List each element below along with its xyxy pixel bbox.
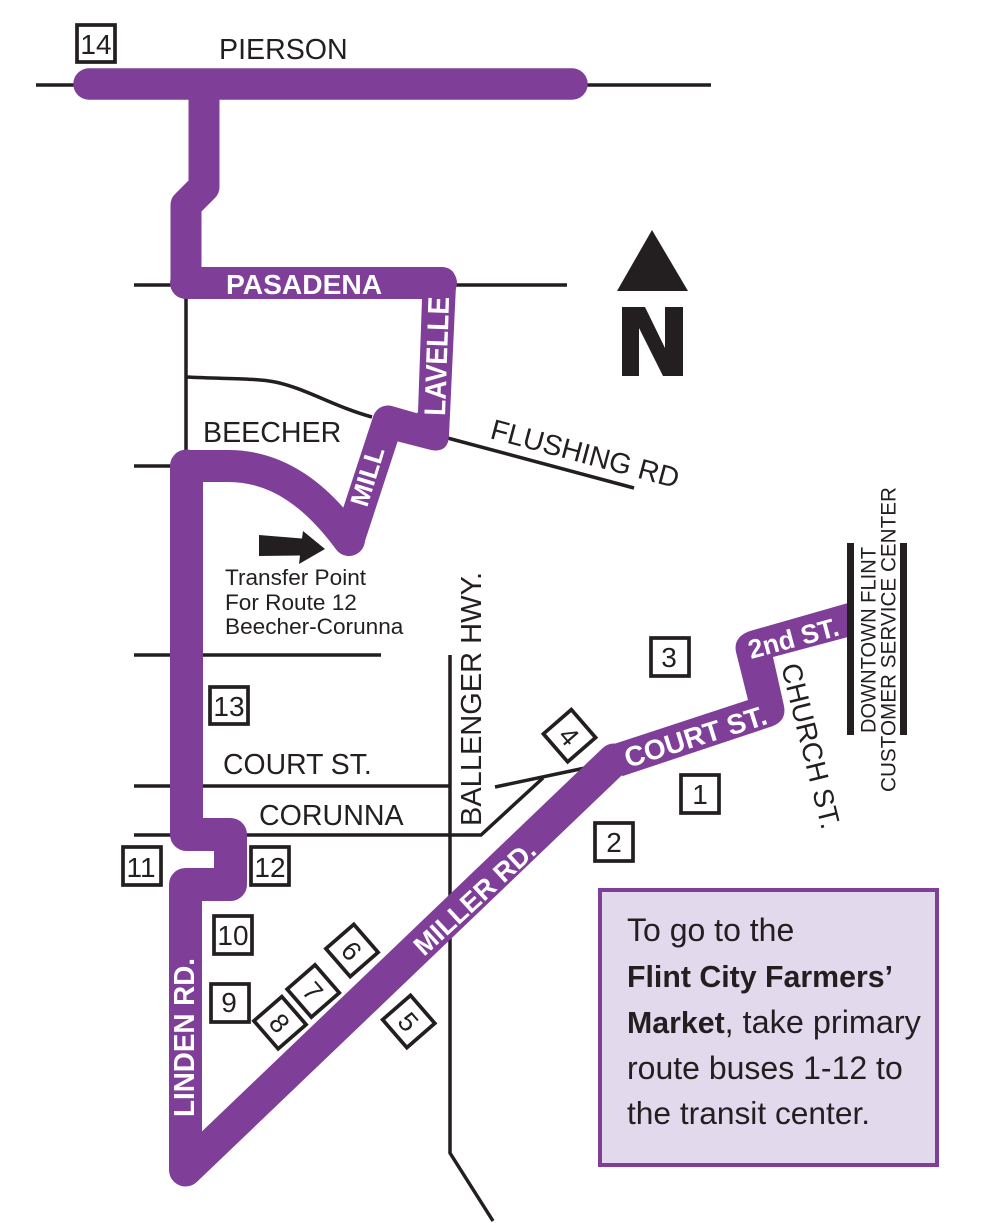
road label: Miller Rd: MILLER RD. <box>408 835 542 961</box>
callout: farmers market: Flint City Farmers’ <box>627 961 893 994</box>
stop 7: 7 <box>296 976 329 1007</box>
stop 8 <box>254 997 306 1049</box>
stop 10 <box>214 916 252 954</box>
downtown label: CUSTOMER SERVICE CENTER <box>876 487 900 792</box>
road label: 2nd St: 2nd ST. <box>745 612 842 665</box>
road label: Ballenger Hwy: BALLENGER HWY. <box>456 572 488 826</box>
callout: farmers market: route buses 1-12 to <box>627 1050 903 1086</box>
stop 2: 2 <box>606 827 622 858</box>
stop 13 <box>210 687 248 724</box>
stop 12: 12 <box>254 852 286 883</box>
stop 3: 3 <box>661 642 677 673</box>
stop 10: 10 <box>217 920 249 951</box>
stop 5: 5 <box>392 1007 424 1038</box>
stop 11 <box>123 847 161 885</box>
stop 4: 4 <box>552 721 585 752</box>
stop 13: 13 <box>213 691 245 722</box>
transfer point arrow <box>259 531 325 564</box>
road label: Church St: CHURCH ST. <box>775 660 846 832</box>
stop 1 <box>681 775 719 813</box>
stop 11: 11 <box>126 852 156 883</box>
stop 9: 9 <box>221 987 237 1018</box>
callout: farmers market: the transit center. <box>627 1095 870 1131</box>
stop 2 <box>595 823 633 861</box>
stop 7 <box>287 965 339 1017</box>
transfer point note: Beecher-Corunna <box>225 614 404 639</box>
stop 14 <box>77 25 115 62</box>
downtown label: DOWNTOWN FLINT <box>856 547 880 733</box>
road label: Court St east: COURT ST. <box>620 700 771 774</box>
callout: farmers market: To go to the <box>627 912 794 948</box>
road label: Pierson: PIERSON <box>219 34 348 66</box>
road label: Flushing Rd: FLUSHING RD <box>487 414 683 495</box>
callout: farmers market <box>600 890 937 1165</box>
road label: Beecher: BEECHER <box>203 417 341 449</box>
road label: Mill: MILL <box>344 443 391 510</box>
callout: farmers market: Market, take primary <box>627 1004 922 1040</box>
stop 9 <box>211 984 249 1022</box>
transfer point note <box>225 565 404 639</box>
stop 1: 1 <box>692 779 708 810</box>
transfer point note: For Route 12 <box>225 590 357 615</box>
downtown label <box>856 487 900 792</box>
stop 4 <box>543 710 596 762</box>
stop 5 <box>383 995 435 1048</box>
road label: Court St west: COURT ST. <box>223 749 372 781</box>
downtown terminal bars <box>847 543 907 735</box>
road label: Corunna: CORUNNA <box>259 800 404 832</box>
north arrow <box>617 230 688 376</box>
road label: Linden Rd: LINDEN RD. <box>169 958 201 1117</box>
stop 6 <box>326 924 378 977</box>
stop 12 <box>251 847 289 885</box>
stop 6: 6 <box>335 936 367 967</box>
stop 3 <box>651 638 689 676</box>
stop 8: 8 <box>263 1008 295 1039</box>
purple route <box>89 84 848 1170</box>
black street lines <box>36 85 711 1221</box>
road label: Pasadena: PASADENA <box>226 268 382 300</box>
transfer point note: Transfer Point <box>225 565 367 590</box>
stop 14: 14 <box>80 29 112 60</box>
road label: Lavelle: LAVELLE <box>419 296 456 416</box>
